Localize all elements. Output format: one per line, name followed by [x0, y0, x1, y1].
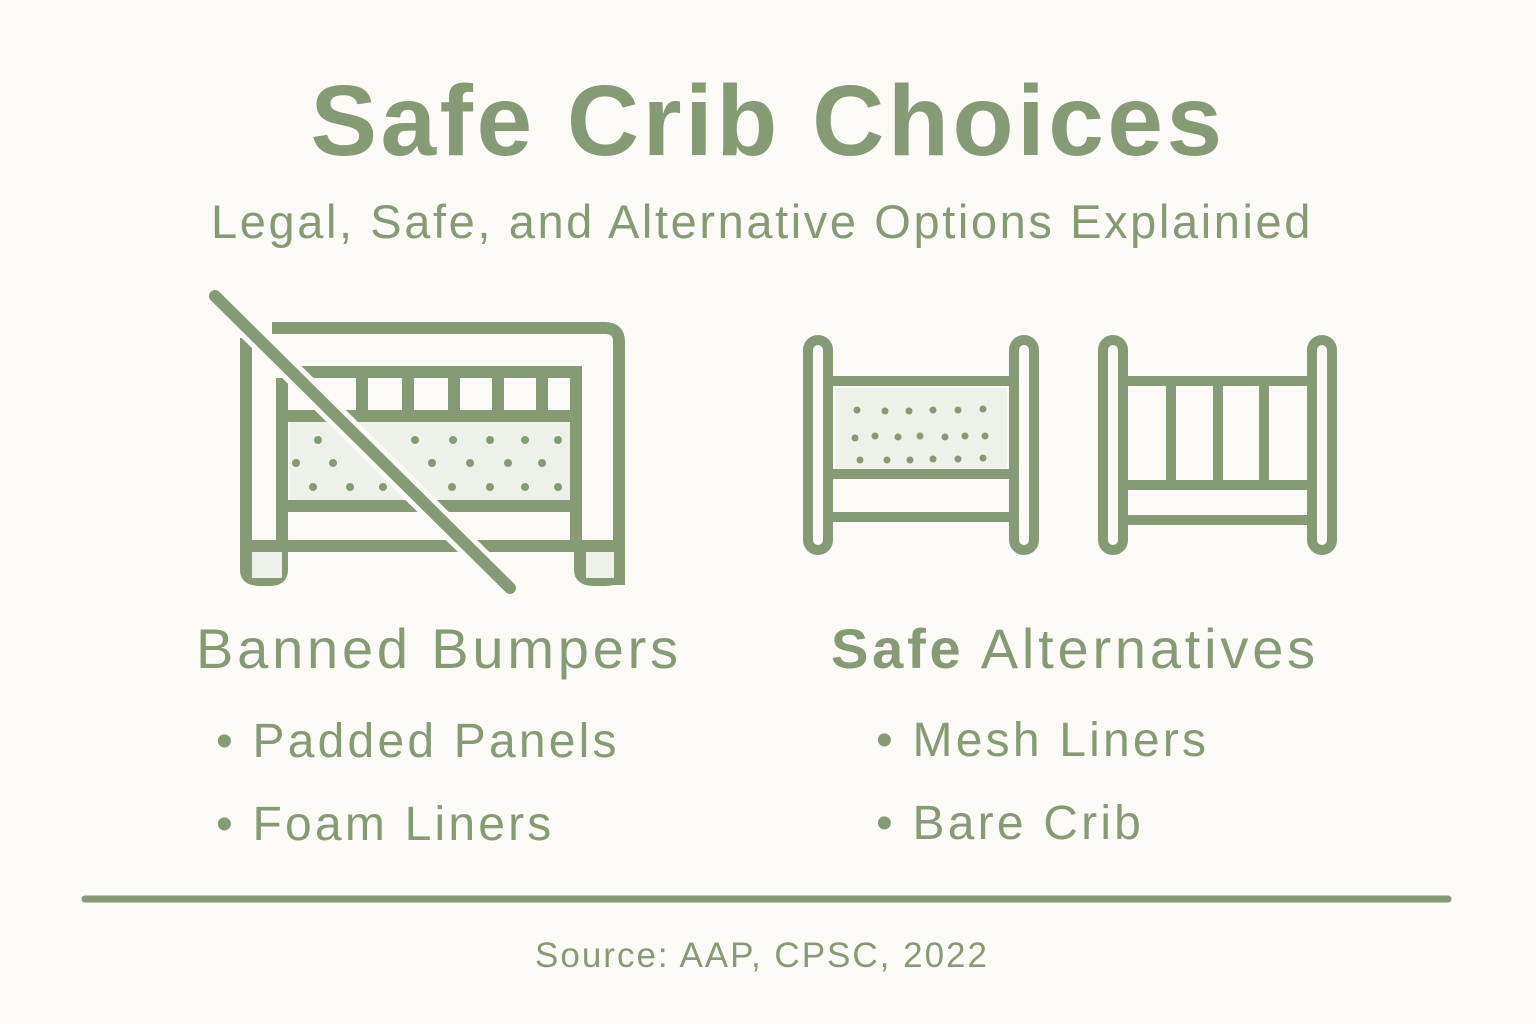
list: banned items	[216, 715, 620, 851]
icon: bare crib	[1103, 340, 1332, 550]
list: safe items	[876, 714, 1209, 850]
list: banned items: • Foam Liners	[216, 798, 555, 851]
subtitle: Legal, Safe, and Alternative Options Explainied	[211, 195, 1313, 248]
divider	[85, 896, 1448, 902]
heading: safe alternatives: Safe Alternatives	[831, 617, 1319, 680]
list: safe items: • Bare Crib	[876, 797, 1144, 850]
source: Source: AAP, CPSC, 2022	[535, 936, 989, 975]
heading: banned bumpers: Banned Bumpers	[196, 617, 682, 680]
title: Safe Crib Choices	[310, 65, 1226, 177]
list: banned items: • Padded Panels	[216, 715, 620, 768]
list: safe items: • Mesh Liners	[876, 714, 1209, 767]
icon: mesh liner crib	[808, 340, 1034, 550]
icon: banned crib with bumper	[215, 296, 619, 588]
